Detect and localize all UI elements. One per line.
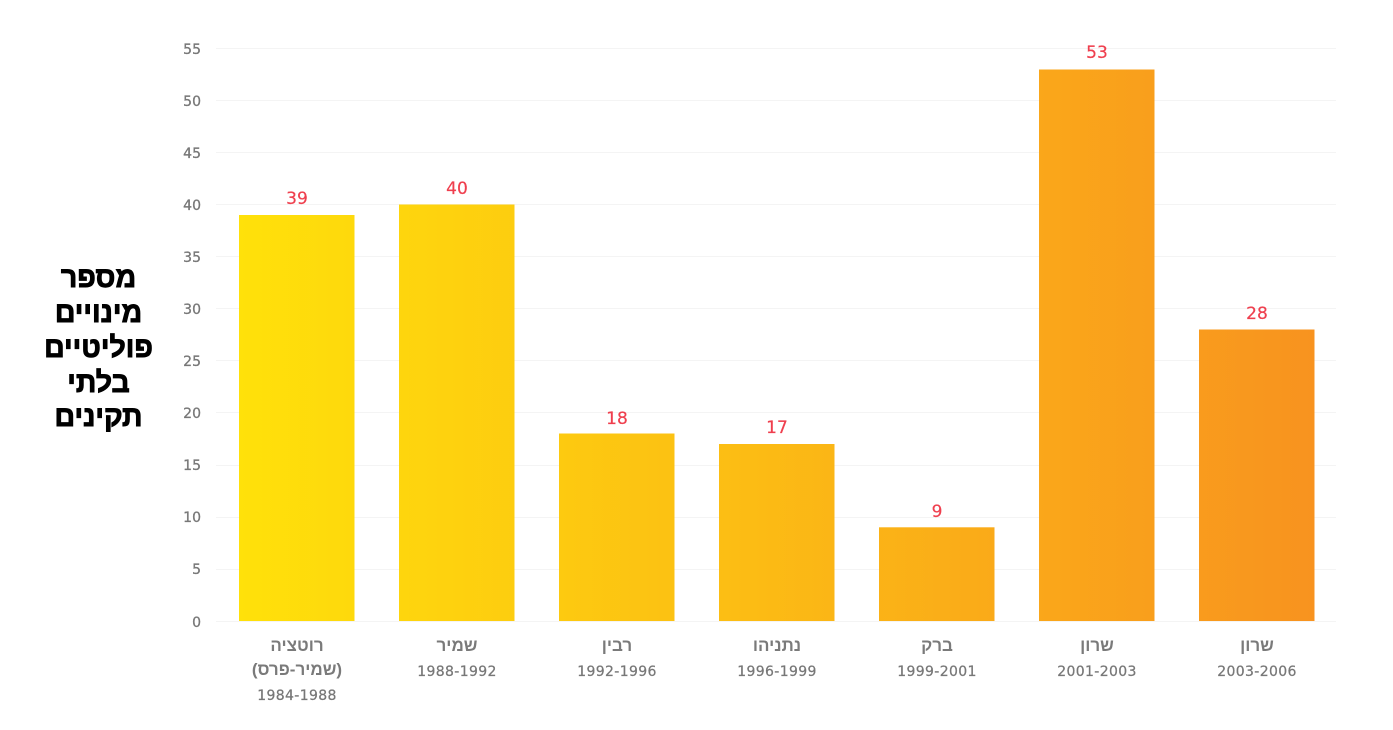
label: Barak: 1999-2001 — [897, 664, 977, 680]
bar: Rabin 18 — [559, 434, 674, 621]
bar value labels: 39 — [286, 189, 308, 209]
bar value labels: 53 — [1086, 43, 1108, 63]
title: y-axis heading: מינויים — [55, 297, 142, 329]
label: Netanyahu — [737, 636, 817, 680]
label: Sharon 2001: 2001-2003 — [1057, 664, 1137, 680]
label: rotation: 1984-1988 — [257, 688, 337, 704]
title: y-axis heading: פוליטיים — [44, 332, 153, 364]
label: Sharon 2001 — [1057, 636, 1137, 680]
label: rotation: רוטציה — [270, 636, 324, 655]
bar value labels: 17 — [766, 418, 788, 438]
label: Barak — [897, 636, 977, 680]
y-axis tick labels: 40 — [183, 198, 201, 214]
title: y-axis heading: בלתי — [67, 367, 130, 399]
x-axis category labels — [252, 636, 1297, 704]
bar value labels: 40 — [446, 179, 468, 199]
y-axis tick labels: 45 — [183, 146, 201, 162]
y-axis tick labels: 15 — [183, 458, 201, 474]
bar value labels — [286, 43, 1268, 522]
label: Shamir — [417, 636, 497, 680]
y-axis tick labels — [183, 42, 201, 631]
y-axis tick labels: 10 — [183, 510, 201, 526]
y-axis tick labels: 30 — [183, 302, 201, 318]
bar value labels: 18 — [606, 409, 628, 429]
y-axis tick labels: 50 — [183, 94, 201, 110]
bar: Barak 9 — [879, 527, 994, 621]
label: Sharon 2003: 2003-2006 — [1217, 664, 1297, 680]
y-axis tick labels: 0 — [192, 615, 201, 631]
label: Sharon 2003 — [1217, 636, 1297, 680]
bar value labels: 9 — [932, 502, 942, 522]
y-axis tick labels: 25 — [183, 354, 201, 370]
label: Rabin — [577, 636, 657, 680]
label: rotation: (שמיר-פרס) — [252, 660, 342, 679]
label: Shamir: שמיר — [437, 636, 478, 655]
label: Netanyahu: 1996-1999 — [737, 664, 817, 680]
bar chart — [239, 70, 1314, 621]
y-axis tick labels: 5 — [192, 562, 201, 578]
label: Barak: ברק — [921, 636, 953, 655]
bar value labels: 28 — [1246, 304, 1268, 324]
bar: Sharon 53 — [1039, 70, 1154, 621]
label: Rabin: רבין — [602, 636, 632, 655]
bar: rotation 39 — [239, 215, 354, 621]
y-axis tick labels: 20 — [183, 406, 201, 422]
y-axis tick labels: 55 — [183, 42, 201, 58]
label: Sharon 2001: שרון — [1080, 636, 1114, 655]
title: y-axis heading — [44, 262, 153, 433]
label: Sharon 2003: שרון — [1240, 636, 1274, 655]
bar: Netanyahu 17 — [719, 444, 834, 621]
label: Rabin: 1992-1996 — [577, 664, 657, 680]
bar: Shamir 40 — [399, 204, 514, 621]
title: y-axis heading: תקינים — [55, 401, 142, 433]
label: rotation — [252, 636, 342, 704]
y-axis tick labels: 35 — [183, 250, 201, 266]
label: Netanyahu: נתניהו — [753, 636, 801, 655]
bar: Sharon 28 — [1199, 330, 1314, 621]
title: y-axis heading: מספר — [61, 262, 136, 294]
label: Shamir: 1988-1992 — [417, 664, 497, 680]
